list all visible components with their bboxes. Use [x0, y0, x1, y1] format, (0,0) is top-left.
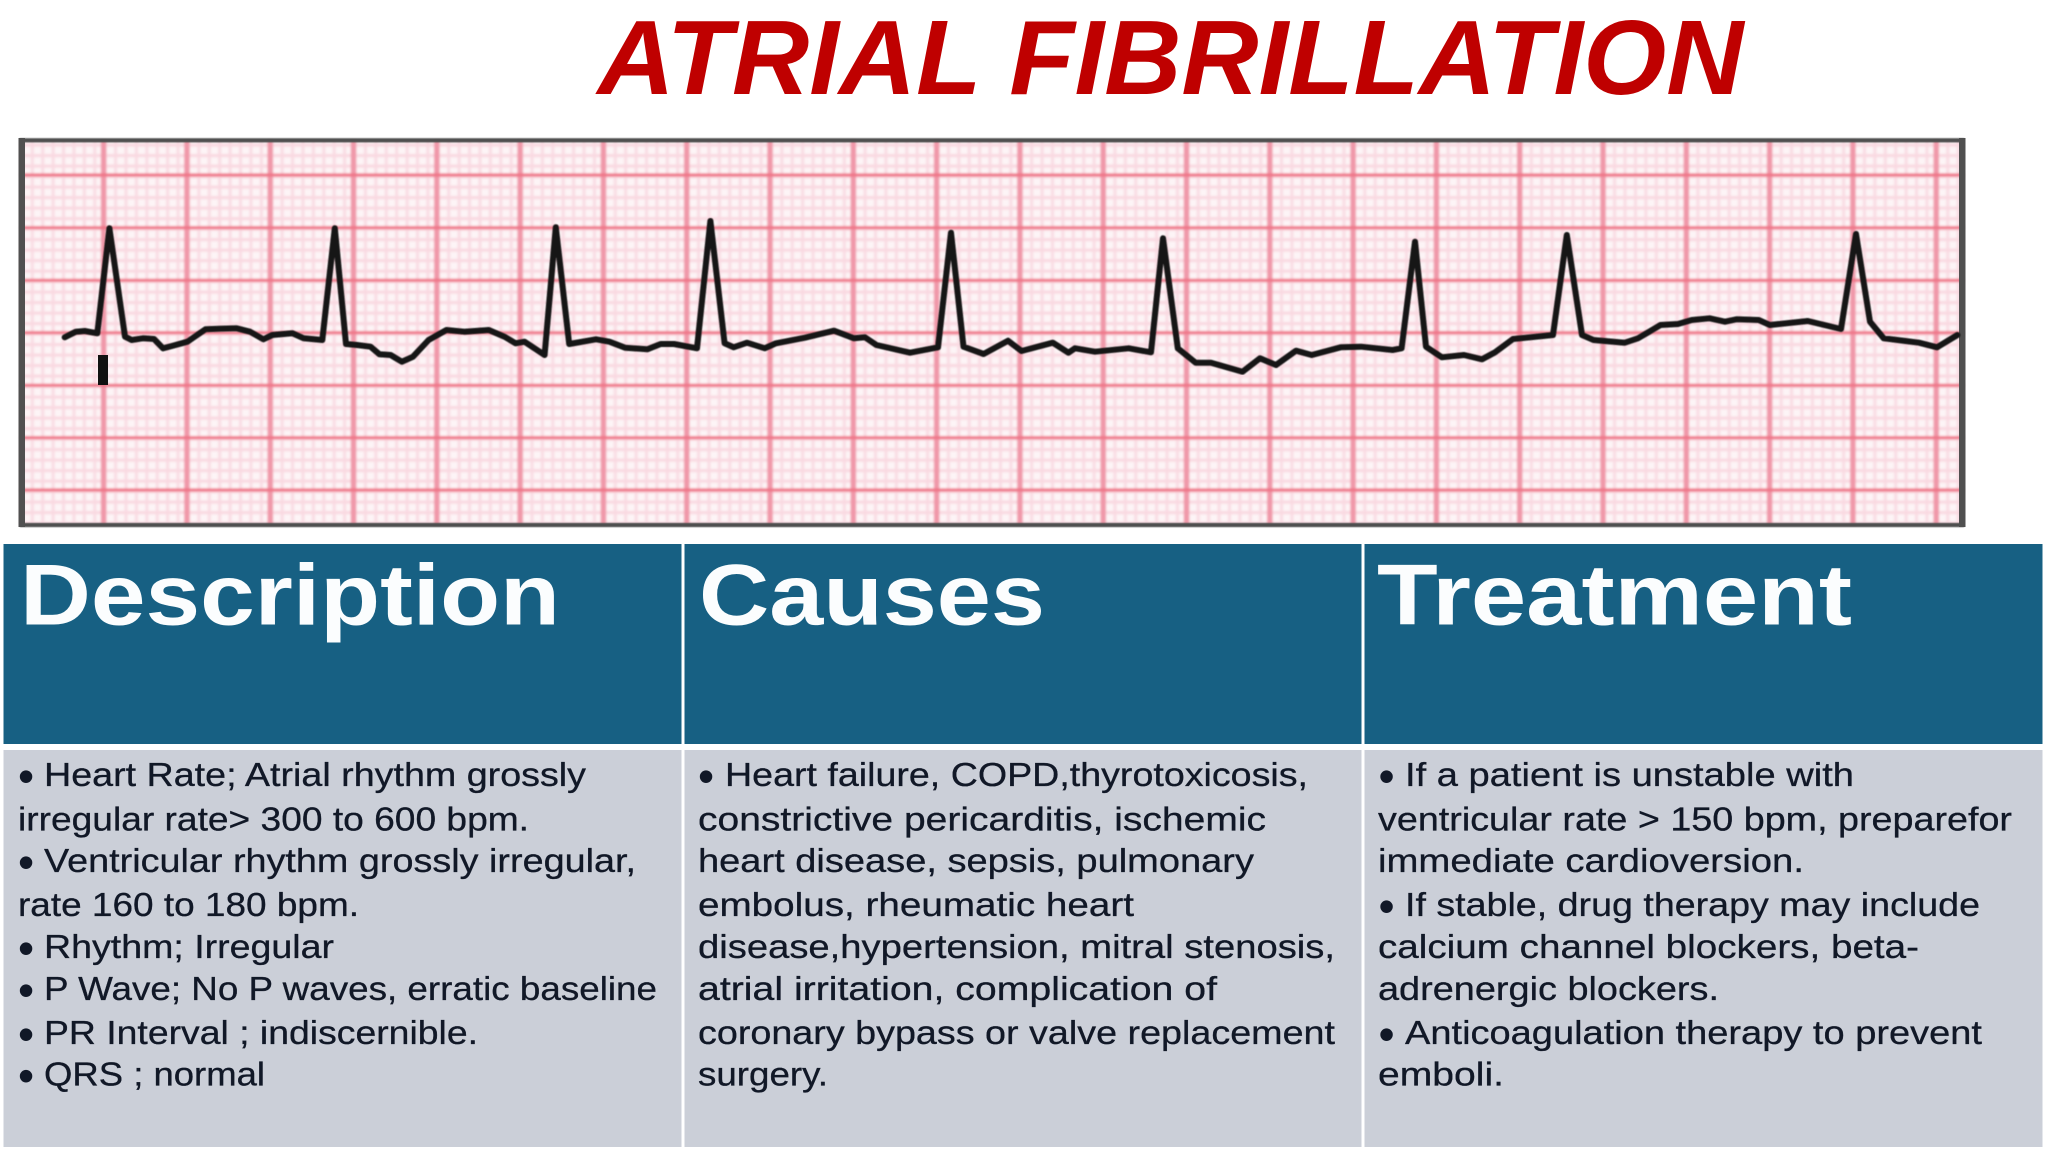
treatment heading: Treatment	[1377, 548, 1852, 644]
description list: P Wave; No P waves, erratic baseline	[44, 971, 657, 1008]
treatment list: emboli.	[1378, 1057, 1504, 1094]
treatment list: If stable, drug therapy may include	[1405, 887, 1980, 924]
treatment header bar	[1364, 544, 2042, 744]
description list: •	[18, 750, 34, 802]
description list: Ventricular rhythm grossly irregular,	[44, 843, 636, 880]
description list: Heart Rate; Atrial rhythm grossly	[44, 757, 586, 794]
description list	[18, 750, 657, 1102]
treatment list: adrenergic blockers.	[1378, 971, 1719, 1008]
treatment body panel	[1364, 750, 2042, 1147]
treatment list: Anticoagulation therapy to prevent	[1405, 1015, 1983, 1052]
causes list: Heart failure, COPD,thyrotoxicosis,	[725, 757, 1308, 794]
description list: •	[18, 1008, 34, 1060]
description list: •	[18, 922, 34, 974]
description header bar	[4, 544, 682, 744]
panel: treatment	[1364, 544, 2042, 1147]
causes list: •	[698, 750, 714, 802]
treatment list: immediate cardioversion.	[1378, 843, 1804, 880]
description list: PR Interval ; indiscernible.	[44, 1015, 478, 1052]
treatment list: calcium channel blockers, beta-	[1378, 929, 1919, 966]
causes body panel	[684, 750, 1362, 1147]
panel: description	[4, 544, 682, 1147]
ECG grid paper	[20, 140, 1964, 525]
causes header bar	[684, 544, 1362, 744]
ECG strip chart	[18, 138, 1966, 527]
calibration mark	[98, 355, 108, 385]
treatment list: •	[1378, 1008, 1395, 1060]
treatment list: •	[1378, 880, 1395, 932]
description body panel	[4, 750, 682, 1147]
description list: •	[18, 1050, 34, 1102]
treatment list: If a patient is unstable with	[1405, 757, 1854, 794]
panel: causes	[684, 544, 1362, 1147]
causes list: heart disease, sepsis, pulmonary	[698, 843, 1254, 880]
causes list: constrictive pericarditis, ischemic	[698, 801, 1266, 838]
ECG frame	[22, 140, 1962, 525]
description list: •	[18, 836, 34, 888]
treatment list: •	[1378, 750, 1395, 802]
causes heading: Causes	[699, 548, 1045, 644]
treatment list: ventricular rate > 150 bpm, preparefor	[1378, 801, 2012, 838]
description list: Rhythm; Irregular	[44, 929, 334, 966]
ECG trace	[65, 221, 1957, 372]
description heading: Description	[20, 548, 560, 644]
treatment list	[1378, 750, 2012, 1094]
causes list: coronary bypass or valve replacement	[698, 1015, 1336, 1052]
causes list	[698, 750, 1336, 1094]
causes list: disease,hypertension, mitral stenosis,	[698, 929, 1335, 966]
description list: irregular rate> 300 to 600 bpm.	[18, 801, 529, 838]
causes list: embolus, rheumatic heart	[698, 887, 1135, 924]
causes list: surgery.	[698, 1057, 828, 1094]
description list: •	[18, 964, 34, 1016]
description list: QRS ; normal	[44, 1057, 265, 1094]
causes list: atrial irritation, complication of	[698, 971, 1218, 1008]
title: ATRIAL FIBRILLATION	[594, 0, 1746, 117]
description list: rate 160 to 180 bpm.	[18, 887, 359, 924]
